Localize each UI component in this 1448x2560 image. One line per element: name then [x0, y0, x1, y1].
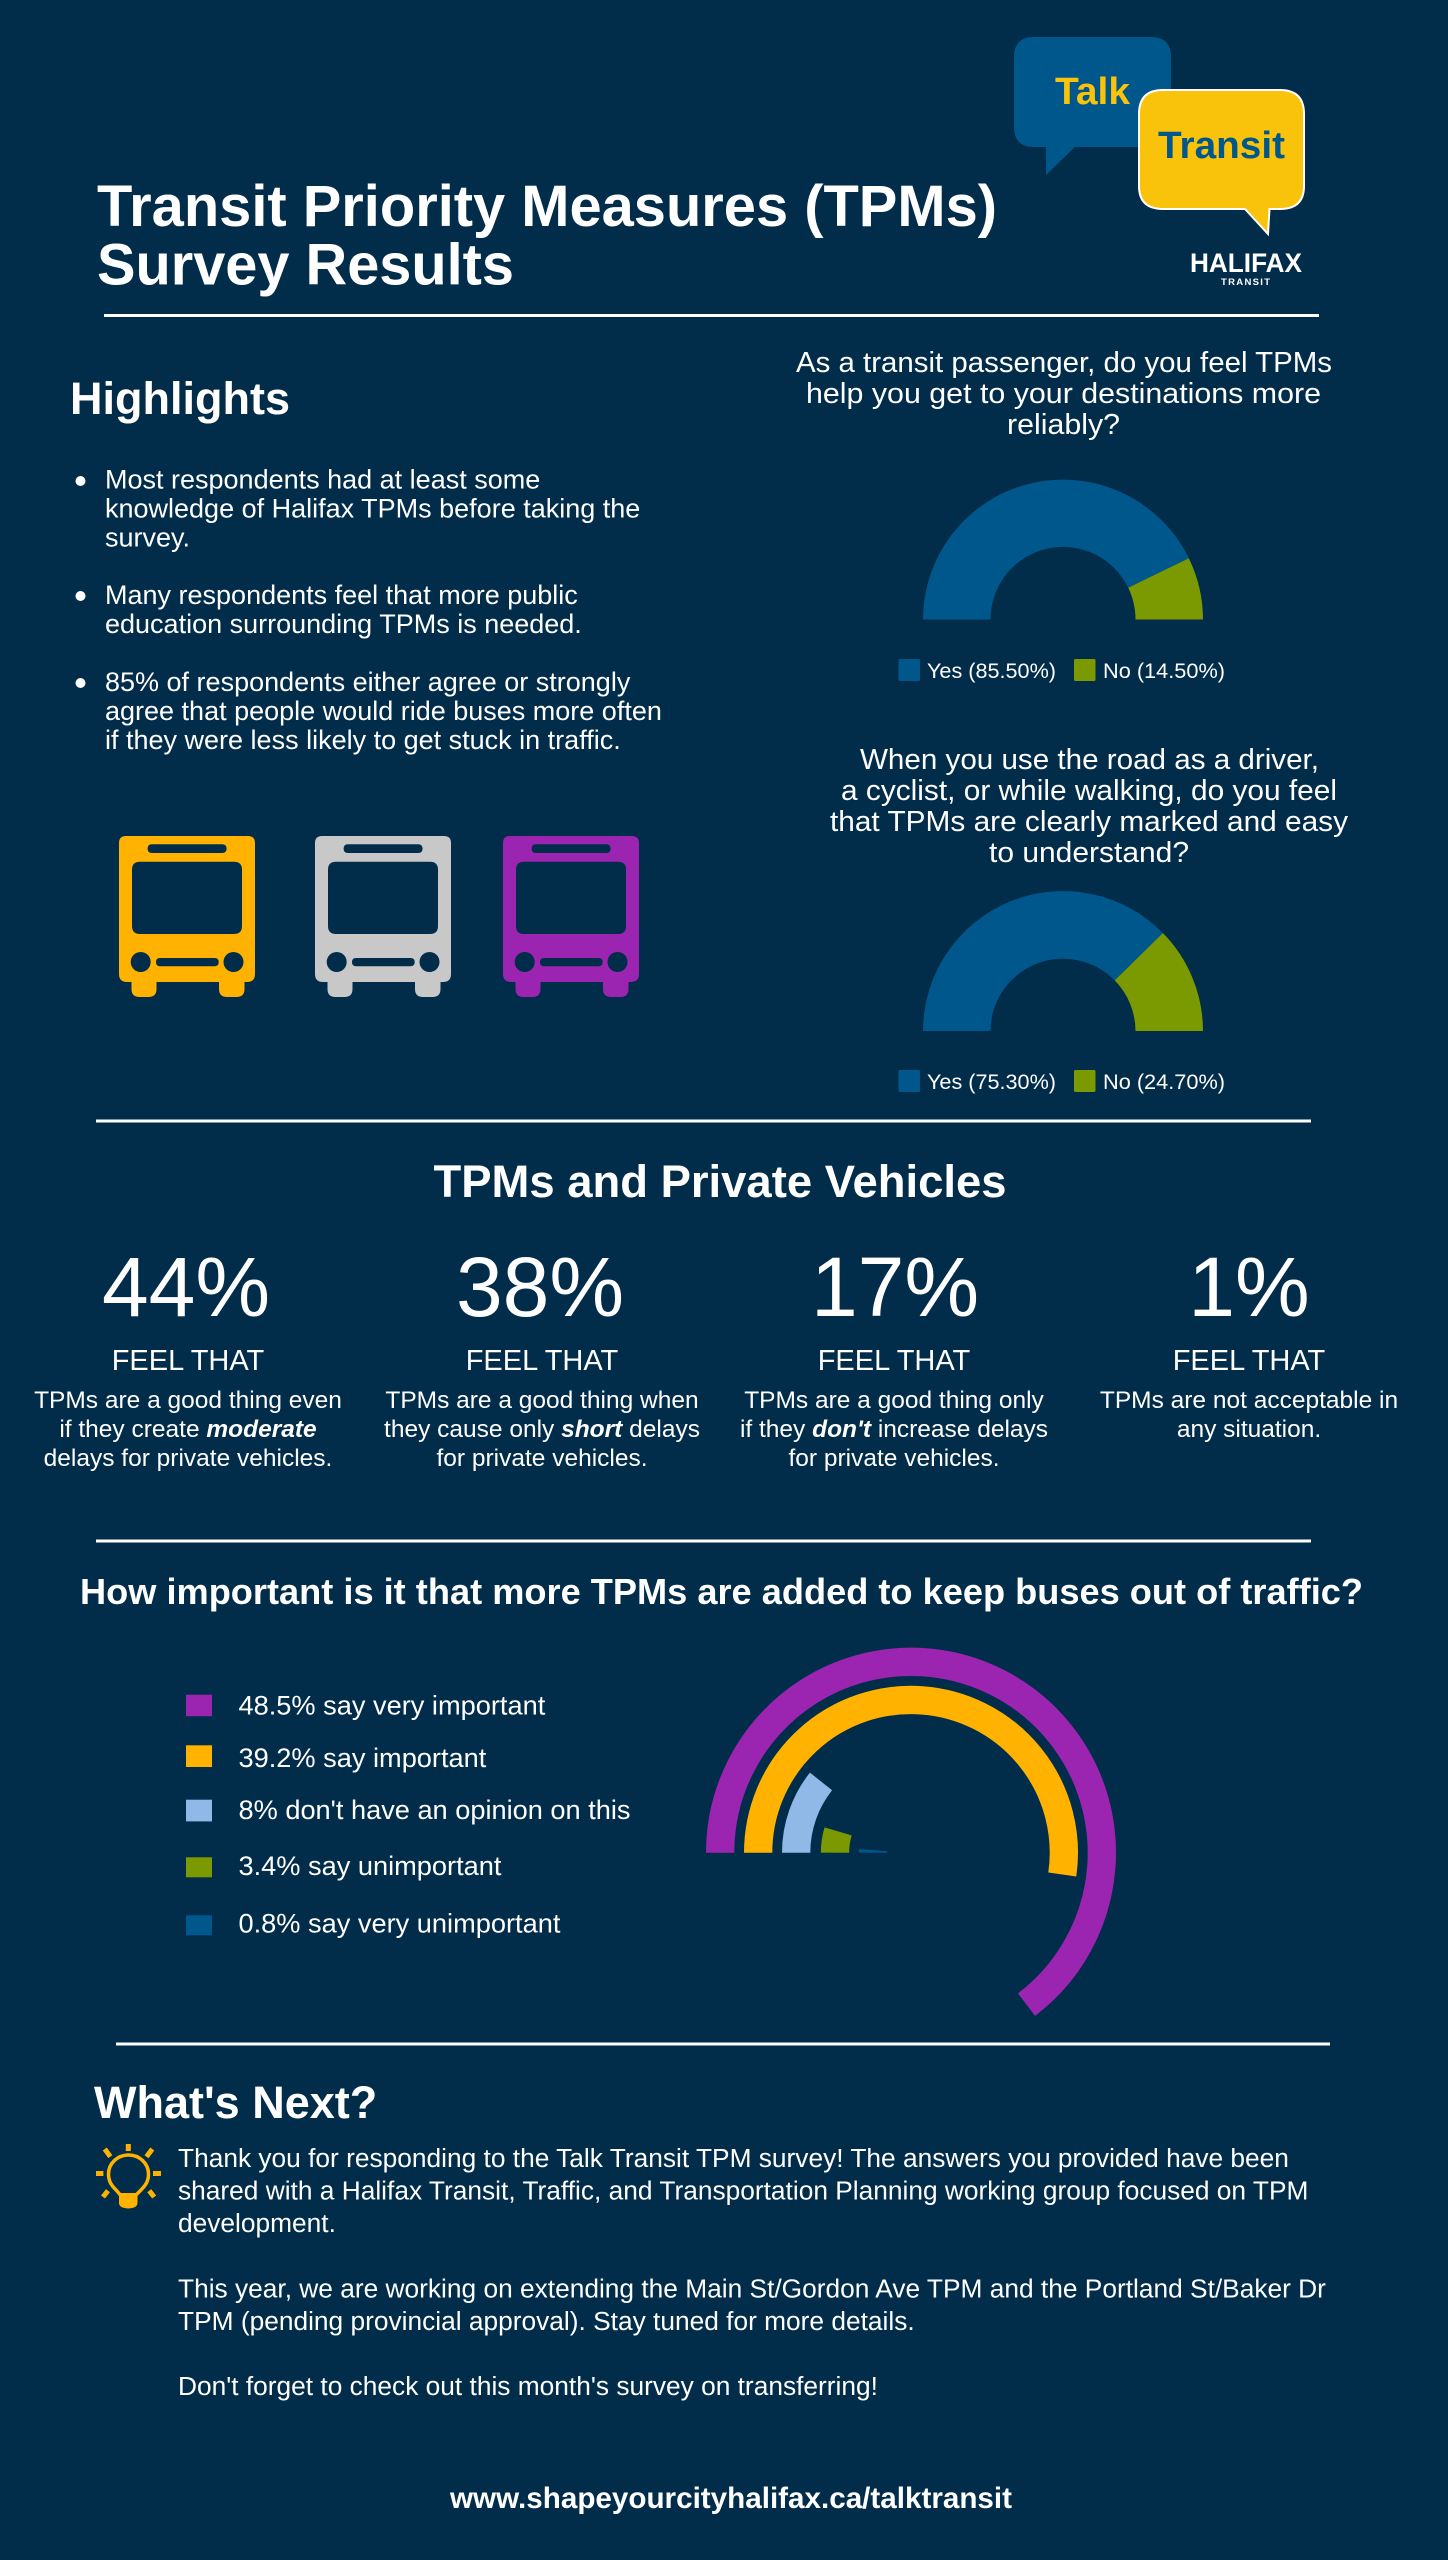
question 2 text: to understand?: [989, 837, 1189, 869]
speech bubble: Talk: Talk: [1055, 71, 1131, 113]
title: [97, 174, 997, 298]
speech bubble: Transit: [1139, 90, 1304, 234]
stat column: 44%: TPMs are a good thing even: [34, 1387, 342, 1414]
legend: question 1: [898, 659, 1225, 683]
bullet 1: knowledge of Halifax TPMs before taking the: [105, 493, 640, 523]
title: Survey Results: [97, 232, 514, 298]
bullet 3: agree that people would ride buses more often: [105, 696, 662, 726]
question 1 text: help you get to your destinations more: [806, 378, 1321, 410]
heading: importance question: How important is it that more TPMs are added to keep buses out of traffic?: [80, 1571, 1363, 1612]
stat column: 17%: for private vehicles.: [788, 1445, 1000, 1472]
stat column: 1%: [1100, 1240, 1398, 1443]
bullet 2: Many respondents feel that more public: [105, 580, 578, 610]
arc: very unimportant 0.8%: [859, 1850, 887, 1853]
legend: question 2: Yes (75.30%): [927, 1071, 1056, 1094]
stat column: 38%: FEEL THAT: [466, 1345, 619, 1377]
icon: purple bus: [503, 836, 639, 997]
legend: importance: [186, 1689, 630, 1939]
title: Transit Priority Measures (TPMs): [97, 174, 997, 239]
half-donut chart: question 1: [923, 480, 1203, 620]
stat column: 1%: any situation.: [1177, 1416, 1321, 1443]
question 2 text: [830, 744, 1349, 869]
what's next body text: This year, we are working on extending the Main St/Gordon Ave TPM and the Portland St/Baker Dr: [178, 2273, 1326, 2303]
wordmark: Halifax Transit: HALIFAX: [1190, 248, 1302, 278]
stat column: 17%: TPMs are a good thing only: [744, 1387, 1045, 1414]
logo: Talk Transit Halifax Transit: [1014, 37, 1304, 288]
stat column: 1%: 1%: [1188, 1240, 1310, 1334]
slice: no 14.5%: [1128, 558, 1203, 620]
arc: very important 48.5%: [720, 1662, 1102, 2005]
question 1 text: reliably?: [1007, 409, 1120, 441]
slice: yes 85.5%: [923, 480, 1189, 620]
what's next body text: Thank you for responding to the Talk Transit TPM survey! The answers you provided have been: [178, 2143, 1289, 2173]
speech bubble: Talk: [1014, 37, 1171, 175]
legend: importance: 8% don't have an opinion on this: [238, 1794, 630, 1825]
legend: question 1: No (14.50%): [1103, 660, 1225, 683]
stat column: 17%: [740, 1240, 1048, 1472]
icon: orange bus: [119, 836, 255, 997]
stat column: 17%: if they don't increase delays: [740, 1416, 1048, 1443]
bullet 2: [76, 580, 582, 639]
question 2 text: that TPMs are clearly marked and easy: [830, 806, 1349, 838]
stat column: 38%: for private vehicles.: [436, 1445, 648, 1472]
stat column: 44%: [34, 1240, 342, 1472]
legend: question 1: Yes (85.50%): [927, 660, 1056, 683]
stat column: 44%: FEEL THAT: [112, 1345, 265, 1377]
stat column: 38%: [384, 1240, 700, 1472]
wordmark: Halifax Transit: TRANSIT: [1221, 277, 1270, 288]
what's next body text: Don't forget to check out this month's survey on transferring!: [178, 2371, 878, 2401]
slice: yes 75.3%: [923, 891, 1163, 1031]
stat column: 44%: if they create moderate: [59, 1416, 317, 1443]
bullet 1: [76, 464, 640, 553]
heading: TPMs and Private Vehicles: TPMs and Private Vehicles: [434, 1156, 1006, 1207]
arc: no opinion 8%: [796, 1781, 821, 1853]
icon: grey bus: [315, 836, 451, 997]
stat column: 38%: they cause only short delays: [384, 1416, 700, 1443]
speech bubble: Transit: Transit: [1158, 125, 1285, 167]
website url: www.shapeyourcityhalifax.ca/talktransit: [449, 2482, 1012, 2515]
stat column: 38%: 38%: [456, 1240, 624, 1334]
stat column: 38%: TPMs are a good thing when: [385, 1387, 699, 1414]
arc: important 39.2%: [758, 1700, 1064, 1874]
half-donut chart: question 2: [923, 891, 1203, 1031]
legend: importance: 48.5% say very important: [238, 1689, 546, 1720]
what's next body text: TPM (pending provincial approval). Stay tuned for more details.: [178, 2306, 915, 2336]
highlights list: [76, 464, 662, 755]
legend: importance: 0.8% say very unimportant: [238, 1908, 561, 1939]
question 1 text: [796, 347, 1332, 441]
what's next body text: shared with a Halifax Transit, Traffic, and Transportation Planning working group focused on TPM: [178, 2176, 1308, 2206]
legend: question 2: [898, 1070, 1225, 1094]
legend: importance: 39.2% say important: [238, 1742, 487, 1773]
heading: What's Next?: What's Next?: [94, 2077, 377, 2128]
arc: unimportant 3.4%: [835, 1831, 838, 1853]
bullet 3: if they were less likely to get stuck in traffic.: [105, 725, 621, 755]
stat column: 44%: delays for private vehicles.: [44, 1445, 332, 1472]
bullet 2: education surrounding TPMs is needed.: [105, 609, 582, 639]
bullet 1: survey.: [105, 523, 190, 553]
stat column: 1%: FEEL THAT: [1173, 1345, 1326, 1377]
stat column: 17%: 17%: [811, 1240, 979, 1334]
heading: Highlights: Highlights: [70, 373, 290, 424]
radial bar chart: [720, 1662, 1102, 2005]
stat column: 1%: TPMs are not acceptable in: [1100, 1387, 1398, 1414]
legend: question 2: No (24.70%): [1103, 1071, 1225, 1094]
icon: light bulb: [96, 2144, 161, 2208]
bullet 1: Most respondents had at least some: [105, 464, 540, 494]
stat column: 44%: 44%: [102, 1240, 270, 1334]
what's next body text: development.: [178, 2208, 336, 2238]
slice: no 24.7%: [1115, 933, 1203, 1031]
legend: importance: 3.4% say unimportant: [238, 1850, 502, 1881]
stat column: 17%: FEEL THAT: [818, 1345, 971, 1377]
question 2 text: a cyclist, or while walking, do you feel: [841, 775, 1337, 807]
what's next body text: [178, 2143, 1326, 2401]
question 1 text: As a transit passenger, do you feel TPMs: [796, 347, 1332, 379]
bullet 3: 85% of respondents either agree or strongly: [105, 667, 631, 697]
bullet 3: [76, 667, 662, 755]
question 2 text: When you use the road as a driver,: [860, 744, 1319, 776]
